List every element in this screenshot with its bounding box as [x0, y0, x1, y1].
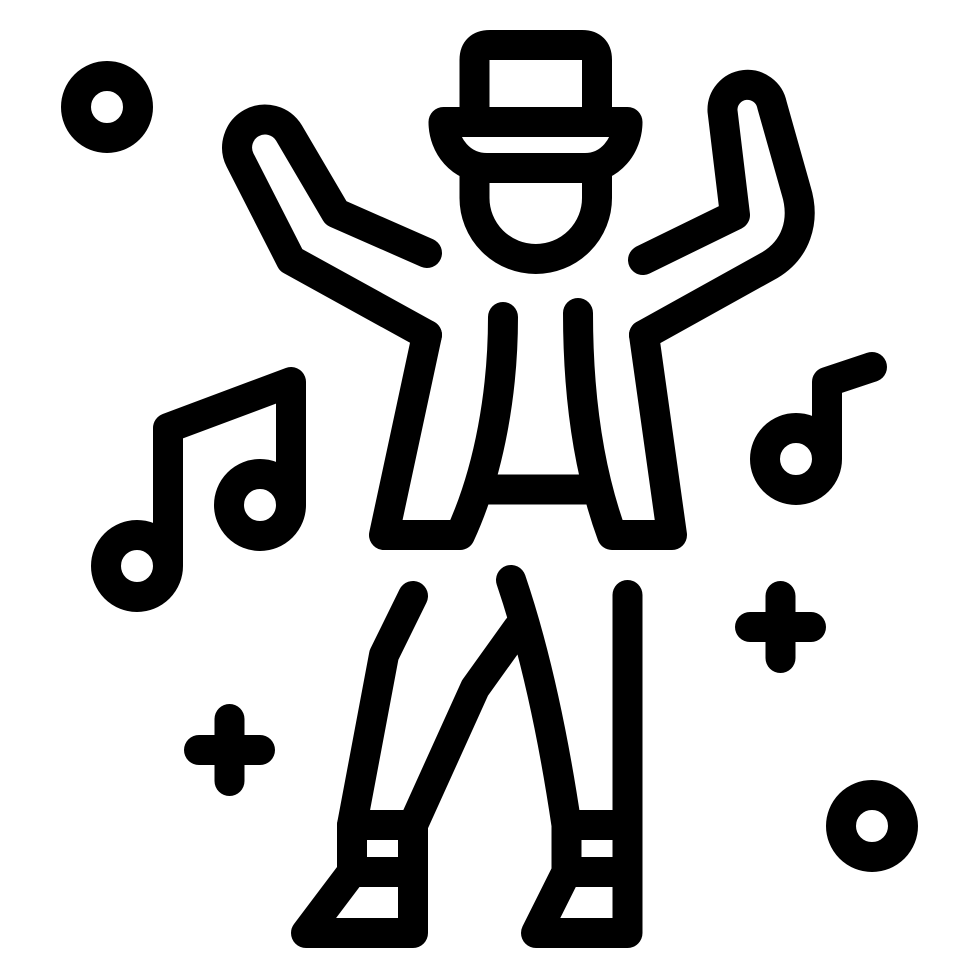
- icon: left plus sign: [199, 719, 260, 781]
- icon: right arm: [643, 85, 800, 335]
- icon: face: [474, 168, 597, 259]
- icon: top hat: [444, 45, 628, 168]
- icon: bottom right circle: [841, 795, 903, 857]
- icon: left leg and boot: [306, 596, 518, 933]
- icon: right leg and boot: [511, 580, 628, 933]
- icon: single music note: [765, 352, 887, 490]
- icon: double music note: [106, 382, 291, 597]
- icon: tailcoat: [384, 313, 672, 535]
- icon: top left circle: [76, 76, 138, 138]
- icon: left arm: [237, 120, 427, 335]
- icon: right plus sign: [750, 596, 811, 658]
